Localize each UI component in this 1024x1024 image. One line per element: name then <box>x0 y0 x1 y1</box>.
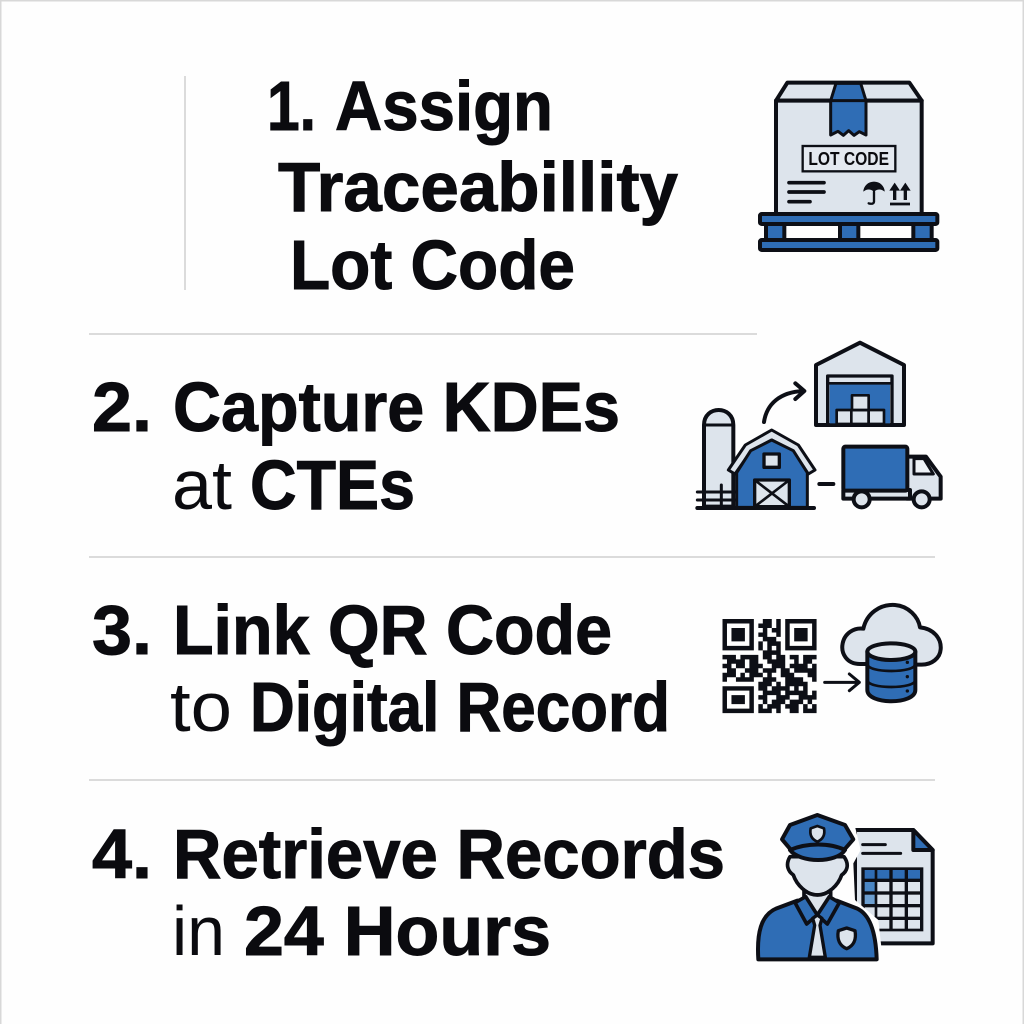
heading: step 1: Assign <box>335 67 553 145</box>
heading: step 3: to <box>170 668 232 746</box>
icon: cloud database <box>842 605 941 701</box>
heading: step 2: CTEs <box>250 446 415 524</box>
icon: box on pallet with lot code <box>760 83 937 250</box>
heading: step 4: in <box>172 892 225 970</box>
heading: step 4: Retrieve Records <box>173 815 725 893</box>
heading: step 1: Lot Code <box>290 226 575 304</box>
heading: step 3: Link QR Code <box>173 591 612 669</box>
heading: step 3: Digital Record <box>250 668 670 746</box>
heading: step 1: 1. <box>267 67 316 145</box>
icon: box on pallet with lot code: LOT CODE <box>808 148 889 169</box>
heading: step 2: 2. <box>92 368 152 446</box>
heading: step 1: Traceabillity <box>278 148 678 226</box>
heading: step 3: 3. <box>92 591 152 669</box>
icon: inspector with records spreadsheet <box>750 815 933 965</box>
heading: step 4: 4. <box>92 815 152 893</box>
heading: step 2: Capture KDEs <box>173 368 620 446</box>
heading: step 1 <box>267 67 678 304</box>
heading: step 4 <box>92 815 725 970</box>
heading: step 2 <box>92 368 620 524</box>
icon: QR code <box>722 621 817 711</box>
heading: step 3 <box>92 591 670 746</box>
heading: step 2: at <box>172 446 232 524</box>
icon: arrow from QR to database <box>825 674 859 691</box>
heading: step 4: 24 Hours <box>244 892 551 970</box>
icon: farm, warehouse and truck <box>697 343 941 508</box>
